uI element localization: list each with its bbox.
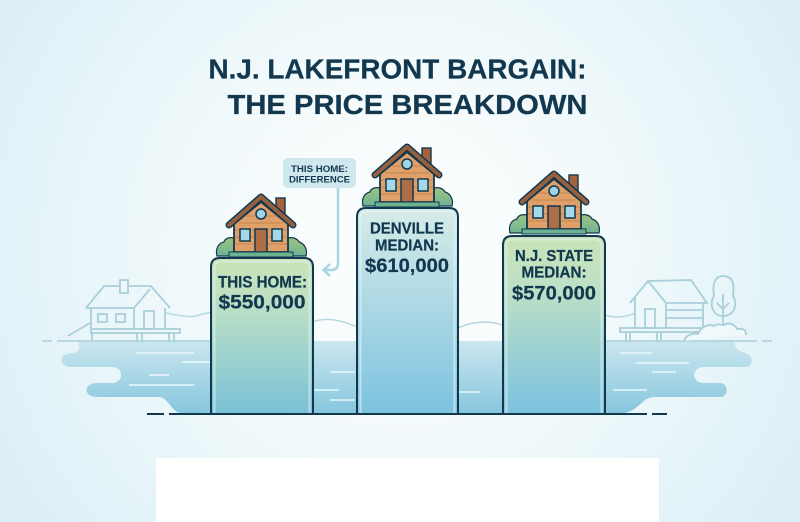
- bar label: this home: THIS HOME:: [218, 274, 307, 292]
- bar label line 2: Denville median: MEDIAN:: [375, 238, 439, 254]
- callout: [283, 158, 356, 188]
- title: [208, 54, 588, 120]
- bar inner highlight: [506, 240, 602, 413]
- left lakeside house: [68, 280, 180, 341]
- title: N.J. LAKEFRONT BARGAIN:: [208, 54, 586, 84]
- title: THE PRICE BREAKDOWN: [228, 89, 588, 120]
- icon: house on state bar: [509, 174, 599, 234]
- callout: DIFFERENCE: [289, 174, 350, 186]
- bar value: Denville median: $610,000: [365, 255, 449, 277]
- horizon line: [42, 340, 772, 342]
- lake water: [62, 341, 752, 414]
- bar value: N.J. state median: $570,000: [512, 282, 596, 304]
- bush: [684, 324, 746, 341]
- icon: house on this home bar: [216, 197, 306, 257]
- ground line: [147, 413, 667, 415]
- bar label: N.J. state median: N.J. STATE: [515, 248, 593, 265]
- water ripples: [129, 353, 689, 400]
- bar value: this home: $550,000: [218, 292, 306, 314]
- bar label line 2: N.J. state median: MEDIAN:: [522, 264, 586, 282]
- bar inner highlight: [360, 212, 454, 413]
- right lakeside house: [620, 276, 746, 341]
- callout: THIS HOME:: [291, 164, 348, 175]
- tree: [712, 276, 735, 325]
- bar: this home: [211, 258, 313, 414]
- arrow: callout to this home bar: [324, 188, 338, 276]
- hills: [166, 312, 635, 328]
- bar: N.J. state median: [503, 236, 605, 414]
- bar label: Denville median: DENVILLE: [370, 220, 444, 238]
- blank white panel: [156, 458, 659, 522]
- icon: house on Denville bar: [362, 147, 452, 207]
- bar inner highlight: [214, 262, 310, 413]
- bar: Denville median: [357, 208, 458, 414]
